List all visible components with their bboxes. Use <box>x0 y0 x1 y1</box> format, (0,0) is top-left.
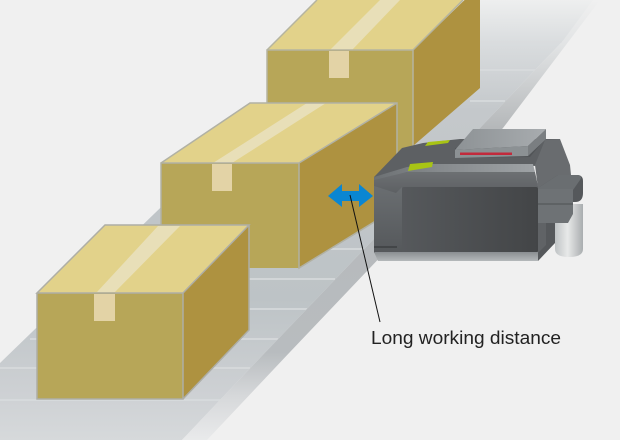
box: front <box>37 225 249 399</box>
printer <box>374 129 583 261</box>
printer: rear body below bracket <box>538 220 555 261</box>
double arrow: working distance <box>328 184 373 207</box>
printer: front upper band <box>374 172 538 200</box>
box: middle <box>161 103 397 268</box>
printer: supply cylinder <box>555 204 583 257</box>
printer: dark rim <box>455 138 546 158</box>
printer: highlight strip <box>374 164 535 181</box>
printer: right shoulder <box>535 139 571 188</box>
printer: red window <box>460 152 512 155</box>
printer: base strip <box>374 252 538 261</box>
printer: left panel <box>374 186 403 253</box>
leader line <box>350 195 380 322</box>
printer: side bracket <box>538 175 583 223</box>
printer: lid <box>455 129 546 158</box>
printer: green tabs <box>425 140 450 146</box>
printer: front panel <box>402 187 538 253</box>
box: back <box>267 0 480 170</box>
label: long working distance: Long working distance <box>371 327 561 348</box>
conveyor side rail <box>182 0 600 440</box>
printer: top surface <box>374 139 560 180</box>
